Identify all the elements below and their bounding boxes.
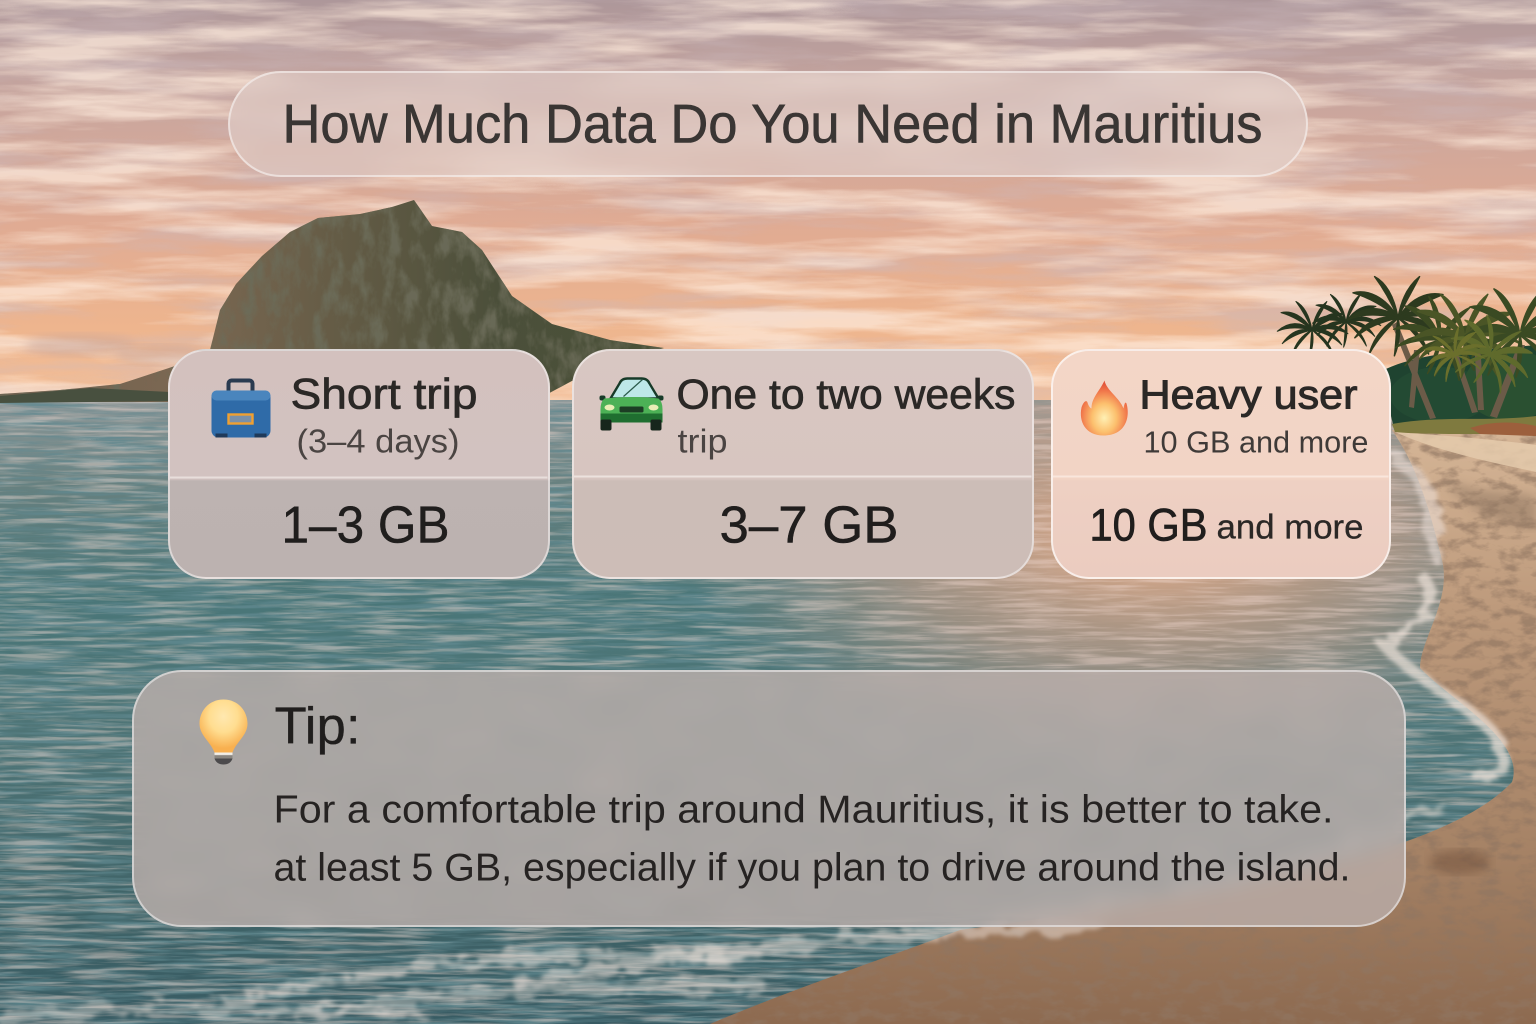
beach — [710, 430, 1536, 1024]
icon: suitcase — [212, 380, 270, 438]
sky — [0, 0, 1536, 410]
title pill — [228, 71, 1308, 177]
trip label: trip — [678, 422, 728, 460]
tip body — [274, 788, 1351, 890]
divider — [170, 476, 548, 478]
panel: one to two weeks — [572, 349, 1034, 579]
icon: light bulb — [200, 700, 248, 764]
mountain — [0, 200, 664, 403]
one to two weeks heading: One to two weeks — [676, 370, 1016, 418]
heavy user data — [1090, 500, 1364, 550]
waves and foam — [0, 460, 1502, 1020]
heavy user data: 10 GB — [1090, 500, 1208, 550]
palm trees — [1277, 277, 1536, 436]
one to two weeks data: 3–7 GB — [720, 496, 898, 554]
short trip data: 1–3 GB — [282, 496, 450, 554]
amount label: 10 GB and more — [1144, 424, 1368, 460]
heavy user heading: Heavy user — [1140, 372, 1358, 418]
icon: car — [600, 378, 664, 430]
tip heading: Tip: — [274, 698, 360, 756]
sea — [0, 400, 1536, 1024]
duration: (3–4 days) — [296, 422, 460, 460]
dark sand patch — [1430, 850, 1490, 874]
icon: flame — [1081, 380, 1128, 436]
title text: How Much Data Do You Need in Mauritius — [282, 92, 1262, 154]
divider — [574, 476, 1032, 478]
divider — [1052, 476, 1388, 478]
panel: short trip — [168, 349, 550, 579]
tip body: For a comfortable trip around Mauritius, it is better to take. — [274, 788, 1334, 832]
panel: heavy user — [1051, 349, 1391, 579]
heavy user data: and more — [1216, 508, 1364, 546]
tip body: at least 5 GB, especially if you plan to drive around the island. — [274, 846, 1351, 890]
short trip heading: Short trip — [290, 370, 478, 418]
panel: tip — [132, 670, 1406, 927]
